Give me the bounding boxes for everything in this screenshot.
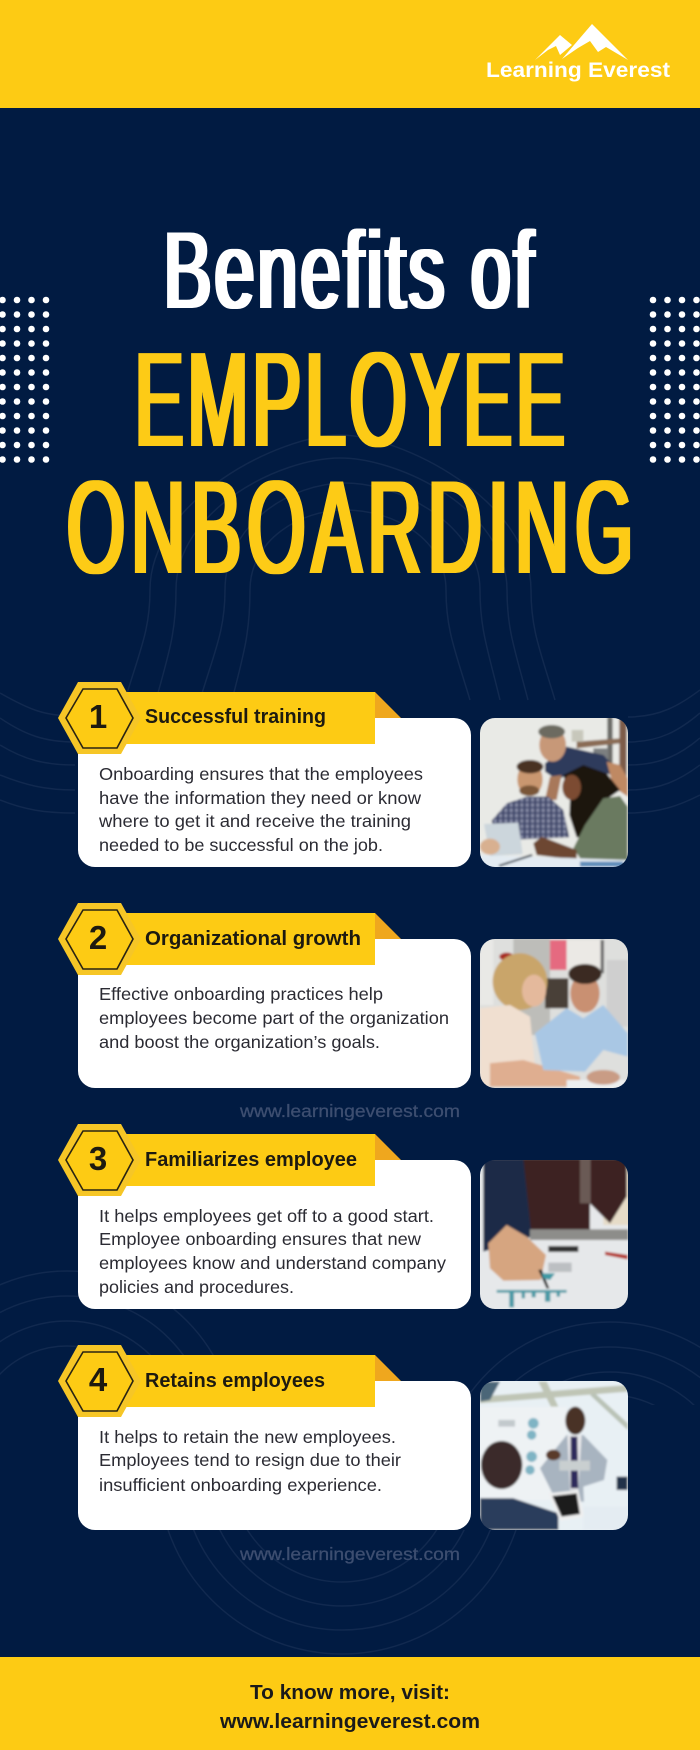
hexagon badge 3: 3 [89, 1140, 107, 1177]
title: Benefits of [164, 208, 534, 332]
heading 1: Successful training [145, 706, 326, 728]
footer band [0, 1657, 700, 1750]
title: ONBOARDING [67, 452, 633, 601]
footer text [219, 1682, 480, 1733]
panel 4: Retains employees [58, 1345, 471, 1530]
hexagon badge 3 [58, 1124, 141, 1196]
hexagon badge 4 [58, 1345, 141, 1417]
body text 2 [99, 984, 449, 1052]
panel 1: Successful training [58, 682, 471, 867]
heading 3: Familiarizes employee [145, 1149, 357, 1171]
logo: Learning Everest: Learning Everest [486, 59, 670, 82]
header band [0, 0, 700, 108]
body text 1: needed to be successful on the job. [99, 835, 383, 855]
photo 2: woman and man at laptop [480, 939, 628, 1088]
hexagon badge 1: 1 [89, 698, 107, 735]
body text 2: Effective onboarding practices help [99, 984, 383, 1004]
panel 2: Organizational growth [58, 903, 471, 1088]
body text 3: It helps employees get off to a good start. [99, 1206, 434, 1226]
dot grid right [650, 297, 700, 463]
watermark: website 2: www.learningeverest.com [239, 1544, 460, 1564]
body text 2: and boost the organization’s goals. [99, 1032, 380, 1052]
body text 1: where to get it and receive the training [98, 811, 411, 831]
hexagon badge 1 [58, 682, 141, 754]
hexagon badge 4: 4 [89, 1361, 108, 1398]
body text 1: have the information they need or know [99, 788, 421, 808]
panel 3: Familiarizes employee [58, 1124, 471, 1309]
heading 2: Organizational growth [145, 928, 361, 950]
title: EMPLOYEE [135, 324, 565, 475]
hexagon badge 2: 2 [89, 919, 107, 956]
body text 2: employees become part of the organization [99, 1008, 449, 1028]
body text 3: policies and procedures. [99, 1277, 294, 1297]
footer text: www.learningeverest.com [219, 1711, 480, 1733]
logo: Learning Everest [486, 24, 670, 82]
title [67, 208, 633, 601]
body text 4 [99, 1427, 401, 1495]
photo 4: presenter and audience [480, 1381, 628, 1530]
hexagon badge 2 [58, 903, 141, 975]
body text 4: insufficient onboarding experience. [99, 1475, 382, 1495]
body text 3: employees know and understand company [99, 1253, 446, 1273]
photo 3: hand with pen over chart [480, 1160, 628, 1309]
photo 1: team around a tablet [480, 718, 628, 867]
body text 1 [98, 764, 423, 855]
body text 3 [99, 1206, 446, 1297]
dot grid left [0, 297, 49, 463]
heading 4: Retains employees [145, 1370, 325, 1392]
footer text: To know more, visit: [250, 1682, 450, 1704]
body text 1: Onboarding ensures that the employees [99, 764, 423, 784]
body text 4: Employees tend to resign due to their [99, 1450, 401, 1470]
body text 3: Employee onboarding ensures that new [99, 1229, 421, 1249]
body text 4: It helps to retain the new employees. [99, 1427, 396, 1447]
watermark: website 1: www.learningeverest.com [239, 1101, 460, 1121]
